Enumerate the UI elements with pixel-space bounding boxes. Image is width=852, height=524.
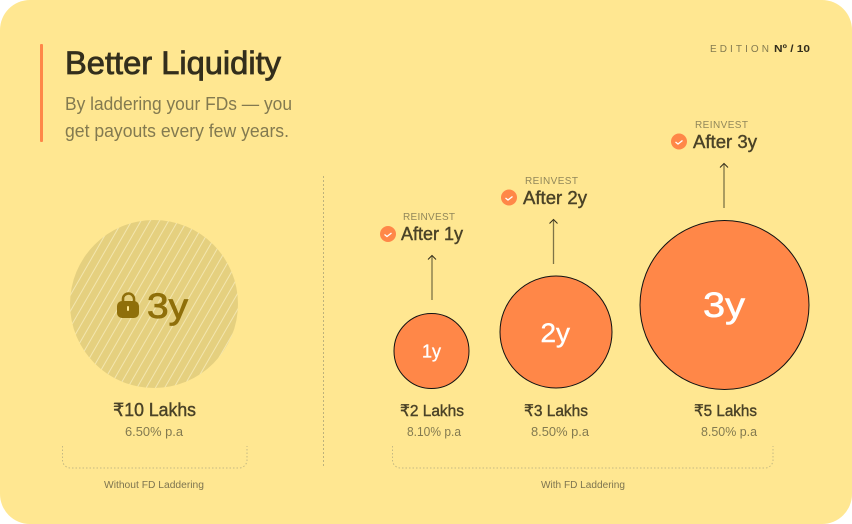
icon: check badge	[671, 134, 687, 150]
locked circle	[70, 220, 238, 388]
divider	[322, 176, 324, 468]
bracket: with FD laddering	[392, 446, 773, 468]
rate: 8.50% p.a	[531, 424, 590, 439]
arrow	[720, 164, 728, 208]
after label: After 2y	[523, 188, 587, 208]
rate: 8.10% p.a	[407, 424, 462, 439]
amount: ₹5 Lakhs	[694, 403, 757, 420]
subtitle: get payouts every few years.	[65, 121, 289, 141]
edition label: EDITION	[710, 44, 769, 55]
icon: lock	[117, 294, 139, 318]
edition label	[710, 44, 811, 55]
edition label: Nº / 10	[774, 44, 811, 55]
icon: check badge	[380, 226, 396, 242]
circle	[500, 276, 612, 388]
reinvest label: REINVEST	[525, 176, 578, 187]
rate: 8.50% p.a	[701, 424, 758, 439]
term: 2y	[540, 318, 571, 348]
reinvest label: REINVEST	[403, 212, 455, 223]
circle	[640, 220, 809, 390]
term: 1y	[422, 340, 442, 362]
locked term: 3y	[147, 287, 189, 326]
panel: 3 year rung	[640, 120, 809, 439]
title: Better Liquidity	[65, 45, 281, 81]
accent bar	[40, 44, 43, 142]
panel: 2 year rung	[500, 176, 612, 439]
icon: check badge	[501, 190, 517, 206]
subtitle: By laddering your FDs — you	[65, 94, 292, 114]
amount: ₹2 Lakhs	[400, 403, 464, 420]
amount: ₹3 Lakhs	[524, 403, 588, 420]
reinvest label: REINVEST	[695, 120, 748, 131]
caption: with FD laddering: With FD Laddering	[541, 480, 625, 491]
term: 3y	[703, 286, 746, 325]
arrow	[550, 220, 558, 264]
bracket	[62, 446, 247, 468]
panel: without FD laddering	[62, 220, 247, 491]
panel: 1 year rung	[380, 212, 469, 439]
circle	[394, 314, 469, 388]
rate: 6.50% p.a	[125, 424, 184, 439]
subtitle	[65, 94, 292, 141]
after label: After 1y	[401, 224, 463, 244]
amount: ₹10 Lakhs	[113, 400, 196, 420]
arrow	[428, 256, 436, 300]
after label: After 3y	[693, 132, 757, 152]
caption: Without FD Laddering	[104, 480, 204, 491]
